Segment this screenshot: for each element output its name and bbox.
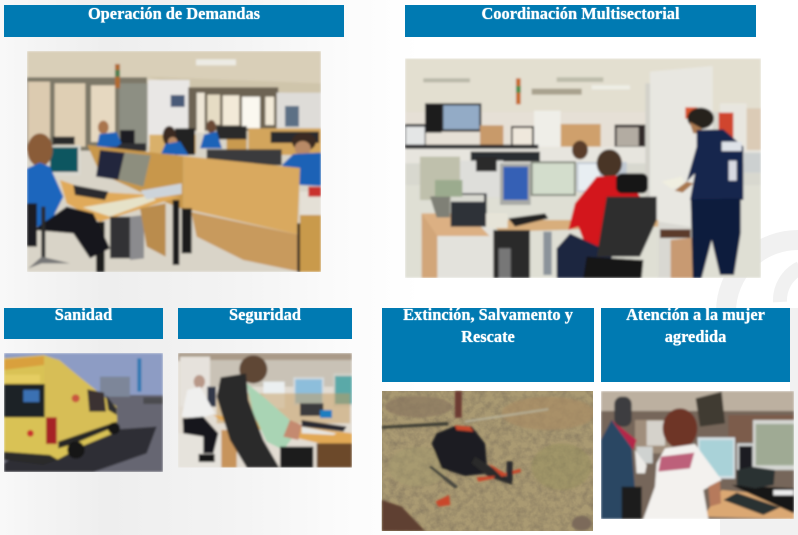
desk, screens, tower — [60, 180, 180, 222]
heading: Extinción, Salvamento y Rescate: Extinción, Salvamento y — [403, 305, 573, 324]
chair — [616, 173, 648, 193]
operator in front — [27, 133, 53, 167]
heading: Sanidad: Sanidad — [55, 305, 112, 324]
pillar — [650, 66, 713, 227]
heading: Operación de Demandas: Operación de Demandas — [88, 4, 260, 23]
heading: Sanidad — [4, 308, 163, 339]
woman — [663, 408, 697, 448]
desk — [487, 220, 658, 232]
man in red at desk — [597, 149, 622, 177]
heading: Extinción, Salvamento y Rescate: Rescate — [461, 327, 515, 346]
heading: Seguridad: Seguridad — [229, 305, 301, 324]
heading: Coordinación Multisectorial — [405, 5, 756, 37]
photo: operators at call desks — [27, 51, 321, 272]
watermark: background logo arcs — [720, 240, 798, 535]
background agents — [98, 121, 109, 134]
monitors — [476, 157, 497, 171]
heading: Seguridad — [178, 308, 352, 339]
heading: Atención a la mujer agredida: agredida — [665, 327, 726, 346]
heading: Atención a la mujer agredida: Atención a la mujer — [626, 305, 765, 324]
heading: Operación de Demandas — [4, 5, 344, 37]
photo: multisector coordination room — [405, 58, 761, 278]
seated older man — [194, 375, 205, 388]
heading: Coordinación Multisectorial: Coordinación Multisectorial — [481, 4, 680, 23]
photo: rescue helicopter on hillside — [382, 391, 595, 531]
wood partitions — [87, 145, 183, 209]
man in navy standing — [687, 108, 714, 129]
heading: Extinción, Salvamento y Rescate — [382, 308, 594, 382]
seated officer — [239, 355, 267, 383]
photo: operator attending women's helpline — [601, 391, 794, 519]
heading: Atención a la mujer agredida — [601, 308, 790, 382]
coat on chair — [601, 420, 635, 519]
photo: security operators — [178, 353, 352, 468]
photo: yellow ambulance — [4, 353, 163, 472]
